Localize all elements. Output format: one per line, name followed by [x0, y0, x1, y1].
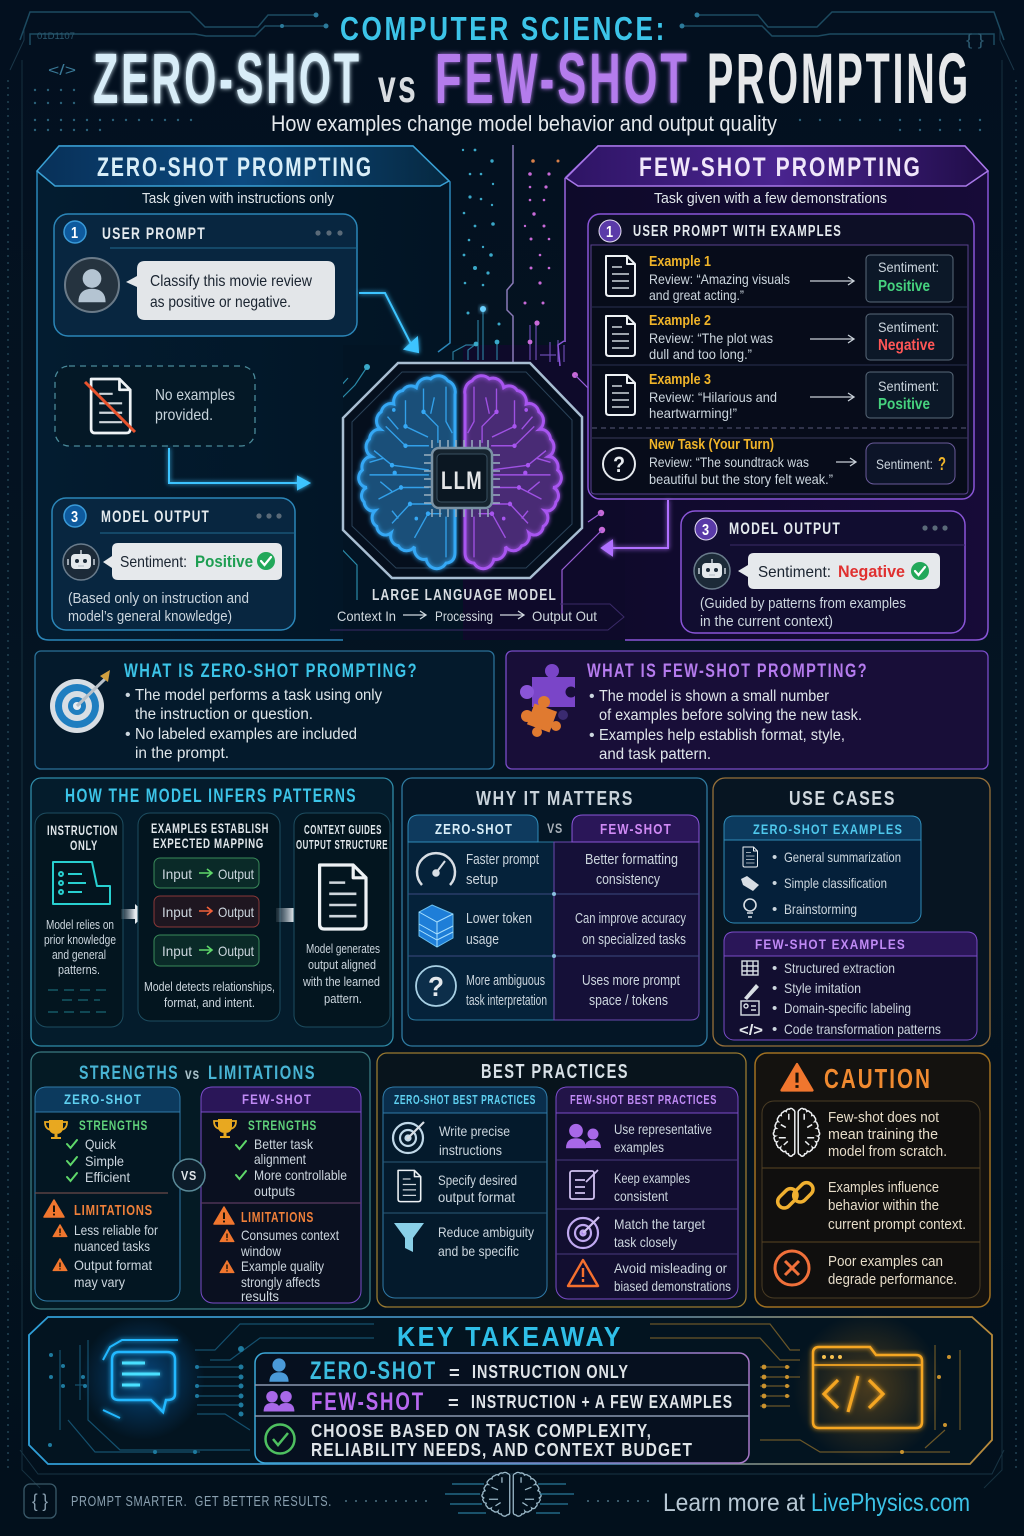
mapping row 1: Input	[162, 866, 192, 882]
icon: code folder	[793, 1313, 943, 1463]
comparison table: FEW-SHOT	[600, 821, 672, 838]
step 1: user prompt: 1	[71, 225, 79, 242]
step: context guides output: output aligned	[308, 957, 376, 972]
zero-shot examples	[724, 816, 921, 923]
card: what is zero-shot: The model performs a task using only	[135, 687, 382, 704]
comparison table	[408, 815, 699, 1020]
few-shot column: FEW-SHOT	[242, 1091, 312, 1107]
few-shot column: alignment	[254, 1151, 306, 1167]
icon: question: ?	[428, 971, 444, 1002]
arrow: prompt to LLM	[359, 293, 418, 352]
step 3: model output: MODEL OUTPUT	[729, 519, 841, 538]
LLM caption: Output Out	[532, 608, 597, 624]
comparison table: VS	[547, 820, 563, 836]
step: context guides output	[294, 813, 390, 1027]
speech bubble: prompt: Classify this movie review	[150, 273, 312, 290]
zero-shot column: nuanced tasks	[74, 1238, 150, 1254]
subtitle: How examples change model behavior and output quality	[271, 111, 777, 136]
step: instruction only: and general	[52, 947, 106, 962]
comparison table: ZERO-SHOT	[435, 821, 513, 838]
few-shot column: LIMITATIONS	[241, 1209, 314, 1226]
LLM octagon	[343, 363, 582, 578]
card: what is few-shot: The model is shown a small number	[599, 688, 830, 705]
mapping row 2: Output	[218, 904, 254, 920]
panel: how the model infers patterns	[31, 778, 393, 1046]
step: context guides output: pattern.	[324, 991, 362, 1006]
card: what is zero-shot: WHAT IS ZERO-SHOT PROMPTING?	[124, 661, 418, 682]
card: what is zero-shot: •	[125, 726, 131, 743]
zero-shot best practices: Write precise	[439, 1123, 510, 1139]
new task: ?	[938, 454, 946, 474]
panel: use cases	[713, 778, 990, 1046]
panel: best practices	[377, 1053, 746, 1307]
comparison table: Faster prompt	[466, 851, 540, 868]
comparison table: consistency	[596, 871, 660, 888]
step 3: model output	[681, 511, 965, 633]
zero-shot header: ZERO-SHOT PROMPTING	[97, 152, 373, 182]
step: instruction only	[35, 813, 123, 1027]
few-shot column: Example quality	[241, 1258, 324, 1274]
few-shot examples: FEW-SHOT EXAMPLES	[755, 936, 906, 952]
output pill	[738, 553, 940, 589]
icon: target	[568, 1217, 599, 1248]
icon: robot	[63, 544, 99, 580]
zero-shot column: LIMITATIONS	[74, 1202, 153, 1219]
example 1: Review: “Amazing visuals	[649, 271, 790, 287]
icon: brain	[445, 1472, 574, 1516]
few-shot examples	[724, 932, 977, 1040]
arrow: no examples to LLM	[169, 448, 309, 489]
icon: question	[416, 966, 456, 1006]
no examples callout: provided.	[155, 407, 213, 424]
takeaway summary box: CHOOSE BASED ON TASK COMPLEXITY,	[311, 1421, 652, 1441]
caution: poor examples: degrade performance.	[828, 1271, 957, 1288]
card: what is zero-shot: No labeled examples are included	[135, 726, 357, 743]
zero-shot best practices: Reduce ambiguity	[438, 1224, 534, 1240]
example 1: Positive	[878, 278, 930, 295]
icon: puzzle	[520, 664, 576, 737]
zero-shot column: Output format	[74, 1257, 152, 1273]
example 3: heartwarming!”	[649, 405, 737, 421]
example 2: Sentiment:	[878, 319, 939, 335]
comparison table: Better formatting	[585, 851, 678, 868]
few-shot examples: </>	[739, 1022, 763, 1039]
few-shot column: More controllable	[254, 1167, 347, 1183]
panel: strengths vs limitations: STRENGTHS	[79, 1063, 179, 1084]
few-shot best practices: Keep examples	[614, 1170, 690, 1186]
few-shot best practices: examples	[614, 1139, 664, 1155]
icon: token cubes	[419, 905, 453, 947]
zero-shot best practices: Specify desired	[438, 1172, 517, 1188]
panel: why it matters: WHY IT MATTERS	[476, 788, 634, 810]
panel: caution: CAUTION	[824, 1063, 932, 1094]
step 3: model output: 3	[702, 522, 710, 539]
few-shot examples: •	[772, 1000, 777, 1017]
zero-shot column: Simple	[85, 1153, 124, 1169]
few-shot examples: Code transformation patterns	[784, 1021, 941, 1037]
panel: key takeaway: KEY TAKEAWAY	[397, 1321, 623, 1352]
card: what is few-shot: and task pattern.	[599, 746, 711, 763]
step 1: user prompt with examples: USER PROMPT WITH EXAMPLES	[633, 223, 842, 240]
zero-shot examples: •	[772, 875, 777, 892]
LLM caption	[330, 587, 624, 630]
caution: context	[775, 1179, 966, 1233]
step 1: user prompt with examples	[588, 214, 974, 499]
zero-shot column	[35, 1087, 180, 1301]
zero-shot subtitle: Task given with instructions only	[142, 190, 334, 207]
card: what is few-shot: of examples before solving the new task.	[599, 707, 862, 724]
example 1	[606, 253, 953, 303]
zero-shot examples: Simple classification	[784, 875, 887, 891]
output pill: Negative	[838, 562, 905, 581]
zero-shot header	[37, 146, 449, 186]
icon: instruction list	[53, 862, 110, 904]
few-shot column: Consumes context	[241, 1227, 339, 1243]
title: vs	[378, 60, 418, 112]
example 2	[606, 312, 953, 362]
footer	[24, 1472, 970, 1518]
mapping row 1: Output	[218, 866, 254, 882]
few-shot best practices: FEW-SHOT BEST PRACTICES	[570, 1092, 717, 1107]
step: instruction only: ONLY	[70, 837, 98, 853]
output pill	[103, 543, 282, 580]
decorative header circuit frame: </>	[48, 62, 76, 79]
panel: use cases: USE CASES	[789, 788, 896, 810]
few-shot best practices: Match the target	[614, 1216, 705, 1232]
step: examples establish mapping: Model detects relationships,	[144, 979, 275, 994]
icon: warning	[568, 1260, 598, 1286]
step: instruction only: prior knowledge	[44, 932, 116, 947]
step: examples establish mapping: format, and intent.	[164, 995, 255, 1010]
card: what is few-shot: Examples help establish format, style,	[599, 727, 845, 744]
footer: PROMPT SMARTER. GET BETTER RESULTS.	[71, 1493, 332, 1510]
few-shot column: results	[241, 1288, 279, 1304]
few-shot column: window	[240, 1243, 282, 1259]
few-shot best practices: task closely	[614, 1234, 677, 1250]
icon: robot	[694, 553, 730, 589]
card: what is few-shot: WHAT IS FEW-SHOT PROMPTING?	[587, 661, 868, 682]
icon: target	[393, 1122, 424, 1153]
takeaway summary box: =	[448, 1393, 460, 1413]
caution: training: Few-shot does not	[828, 1109, 940, 1126]
card: what is few-shot: •	[589, 727, 595, 744]
few-shot examples: Domain-specific labeling	[784, 1000, 911, 1016]
LLM caption: LARGE LANGUAGE MODEL	[372, 587, 557, 604]
icon: checklist	[570, 1170, 598, 1199]
few-shot column	[201, 1087, 361, 1304]
comparison table: space / tokens	[589, 992, 668, 1009]
icon: brain left hemisphere	[359, 376, 455, 569]
panel: strengths vs limitations: LIMITATIONS	[208, 1063, 316, 1084]
step: examples establish mapping: EXPECTED MAPPING	[153, 835, 264, 851]
icon: target	[50, 670, 110, 733]
zero-shot best practices: ZERO-SHOT BEST PRACTICES	[394, 1092, 536, 1107]
step: instruction only: patterns.	[58, 962, 100, 977]
icon: chat bubble	[81, 1316, 205, 1440]
step 1: user prompt: USER PROMPT	[102, 224, 206, 243]
step: context guides output: with the learned	[302, 974, 380, 989]
few-shot subtitle: Task given with a few demonstrations	[654, 190, 887, 207]
example 2: dull and too long.”	[649, 346, 752, 362]
few-shot best practices	[556, 1087, 738, 1299]
mapping row 2: Input	[162, 904, 192, 920]
zero-shot examples: ZERO-SHOT EXAMPLES	[753, 821, 903, 837]
output pill: Positive	[195, 552, 253, 571]
few-shot best practices: biased demonstrations	[614, 1278, 731, 1294]
LLM chip	[424, 440, 500, 517]
icon: people	[566, 1124, 601, 1148]
comparison table: Lower token	[466, 910, 532, 927]
mapping row 3: Output	[218, 943, 254, 959]
output pill: Sentiment:	[758, 564, 831, 581]
card: what is few-shot: •	[589, 688, 595, 705]
new task: beautiful but the story felt weak.”	[649, 471, 833, 487]
few-shot examples: •	[772, 960, 777, 977]
example 1: Example 1	[649, 253, 711, 270]
zero-shot column: ZERO-SHOT	[64, 1091, 142, 1107]
few-shot examples: •	[772, 1021, 777, 1038]
decorative header circuit frame: { }	[966, 32, 985, 49]
comparison table: usage	[466, 931, 499, 948]
example 2: Negative	[878, 337, 935, 354]
caution: poor examples	[775, 1251, 957, 1288]
title: ZERO-SHOT	[93, 40, 362, 119]
new task: Sentiment:	[876, 456, 933, 472]
decorative header circuit frame	[20, 12, 1004, 131]
zero-shot column: Less reliable for	[74, 1222, 158, 1238]
few-shot best practices: Use representative	[614, 1121, 712, 1137]
step 1: user prompt with examples: 1	[606, 224, 614, 241]
example 2: Review: “The plot was	[649, 330, 773, 346]
example 1: and great acting.”	[649, 287, 744, 303]
caution: training: mean training the	[828, 1126, 938, 1143]
icon: user avatar	[65, 258, 119, 312]
comparison table: setup	[466, 871, 498, 888]
new task	[603, 436, 955, 487]
arrow	[276, 903, 304, 927]
example 3: Positive	[878, 396, 930, 413]
output pill: Sentiment:	[120, 554, 187, 571]
caution: training	[773, 1108, 947, 1160]
no examples callout: No examples	[155, 387, 235, 404]
example 3: Example 3	[649, 371, 711, 388]
caution: training: model from scratch.	[828, 1143, 947, 1160]
example 1: Sentiment:	[878, 259, 939, 275]
comparison table: Can improve accuracy	[575, 910, 686, 927]
icon: gauge	[417, 853, 455, 885]
comparison table: task interpretation	[466, 992, 547, 1009]
no examples callout	[55, 366, 255, 446]
zero-shot column: Efficient	[85, 1169, 130, 1185]
step: instruction only: INSTRUCTION	[47, 822, 118, 838]
step 1: user prompt	[54, 214, 357, 336]
example 2: Example 2	[649, 312, 711, 329]
takeaway summary box: =	[449, 1363, 461, 1383]
step: examples establish mapping	[138, 813, 280, 1021]
takeaway summary box: ZERO-SHOT	[310, 1357, 437, 1385]
zero-shot column: may vary	[74, 1274, 125, 1290]
vs badge	[173, 1159, 205, 1191]
caution: context: behavior within the	[828, 1197, 939, 1214]
icon: document	[320, 865, 366, 929]
arrow	[121, 904, 146, 924]
step: context guides output: OUTPUT STRUCTURE	[296, 837, 388, 852]
title: FEW-SHOT	[435, 40, 690, 119]
example 3: Review: “Hilarious and	[649, 389, 777, 405]
LLM caption: Context In	[337, 608, 396, 624]
comparison table: Uses more prompt	[582, 972, 681, 989]
step 3: model output: (Guided by patterns from examples	[700, 595, 906, 612]
panel: few-shot	[565, 146, 988, 640]
zero-shot best practices: output format	[438, 1189, 515, 1205]
footer: { }	[32, 1491, 48, 1511]
step 3: model output	[52, 498, 295, 630]
takeaway summary box: INSTRUCTION + A FEW EXAMPLES	[471, 1392, 733, 1412]
new task: ?	[613, 452, 625, 477]
few-shot header	[566, 146, 988, 186]
step: context guides output: Model generates	[306, 941, 380, 956]
card: what is zero-shot: •	[125, 687, 131, 704]
mapping row 2	[154, 896, 259, 927]
icon: document	[398, 1170, 421, 1202]
central circuit decoration	[313, 145, 605, 615]
few-shot examples: •	[772, 980, 777, 997]
card: what is zero-shot: in the prompt.	[135, 745, 229, 762]
zero-shot examples: Brainstorming	[784, 901, 857, 917]
zero-shot column: STRENGTHS	[79, 1117, 148, 1133]
panel: zero-shot	[37, 146, 450, 640]
step 3: model output: model’s general knowledge)	[68, 608, 232, 625]
panel: strengths vs limitations	[31, 1052, 370, 1309]
example 3: Sentiment:	[878, 378, 939, 394]
new task: New Task (Your Turn)	[649, 436, 774, 453]
step 3: model output: MODEL OUTPUT	[101, 507, 210, 526]
panel: strengths vs limitations: vs	[185, 1066, 200, 1083]
icon: brain right hemisphere	[465, 376, 561, 569]
zero-shot best practices: and be specific	[438, 1243, 519, 1259]
step: examples establish mapping: EXAMPLES ESTABLISH	[151, 820, 269, 836]
takeaway summary box	[255, 1353, 749, 1463]
example 3	[606, 371, 953, 421]
title	[93, 10, 971, 119]
few-shot best practices: Avoid misleading or	[614, 1260, 727, 1276]
zero-shot examples: •	[772, 901, 777, 918]
zero-shot examples: General summarization	[784, 849, 901, 865]
few-shot best practices: consistent	[614, 1188, 668, 1204]
panel: best practices: BEST PRACTICES	[481, 1061, 629, 1083]
panel: key takeaway	[20, 1313, 1004, 1474]
step 3: model output: 3	[71, 509, 79, 526]
zero-shot examples: •	[772, 849, 777, 866]
step: context guides output: CONTEXT GUIDES	[304, 822, 382, 837]
footer: Learn more at	[663, 1489, 805, 1517]
zero-shot column: Quick	[85, 1136, 117, 1152]
panel: why it matters	[402, 778, 707, 1046]
step 3: model output: (Based only on instruction and	[68, 590, 249, 607]
decorative header circuit frame: 01D1107	[37, 31, 75, 41]
speech bubble: prompt	[126, 261, 335, 320]
few-shot column: Better task	[254, 1136, 314, 1152]
few-shot column: strongly affects	[241, 1274, 320, 1290]
LLM chip: LLM	[441, 467, 483, 495]
caution: poor examples: Poor examples can	[828, 1253, 943, 1270]
icon: funnel	[394, 1223, 424, 1252]
takeaway summary box: RELIABILITY NEEDS, AND CONTEXT BUDGET	[311, 1440, 693, 1460]
arrow: few-shot prompt to output	[602, 500, 668, 555]
caution: context: current prompt context.	[828, 1216, 966, 1233]
step 3: model output: in the current context)	[700, 613, 833, 630]
step: instruction only: Model relies on	[46, 917, 114, 932]
takeaway summary box: FEW-SHOT	[311, 1388, 425, 1416]
few-shot header: FEW-SHOT PROMPTING	[639, 152, 922, 182]
caution: context: Examples influence	[828, 1179, 939, 1196]
arrow: LLM to zero-shot output	[296, 553, 342, 555]
few-shot examples: Structured extraction	[784, 960, 895, 976]
new task: Review: “The soundtrack was	[649, 454, 809, 470]
zero-shot best practices: instructions	[439, 1142, 502, 1158]
speech bubble: prompt: as positive or negative.	[150, 294, 291, 311]
few-shot column: outputs	[254, 1183, 295, 1199]
icon: caution triangle	[782, 1064, 812, 1090]
mapping row 1	[154, 858, 259, 888]
few-shot column: STRENGTHS	[248, 1117, 317, 1133]
takeaway summary box: INSTRUCTION ONLY	[472, 1362, 629, 1382]
card: what is few-shot	[506, 651, 988, 769]
comparison table: on specialized tasks	[582, 931, 686, 948]
mapping row 3	[154, 935, 259, 966]
title: COMPUTER SCIENCE:	[340, 10, 667, 47]
few-shot examples: Style imitation	[784, 980, 861, 996]
mapping row 3: Input	[162, 943, 192, 959]
LLM caption: Processing	[435, 608, 493, 624]
panel: how the model infers patterns: HOW THE MODEL INFERS PATTERNS	[65, 786, 357, 807]
card: what is zero-shot: the instruction or question.	[135, 706, 313, 723]
vs badge: VS	[181, 1168, 197, 1183]
card: what is zero-shot	[35, 651, 494, 769]
footer: LivePhysics.com	[811, 1489, 970, 1517]
panel: caution	[755, 1053, 990, 1307]
comparison table: More ambiguous	[466, 972, 545, 989]
zero-shot best practices	[383, 1087, 547, 1298]
